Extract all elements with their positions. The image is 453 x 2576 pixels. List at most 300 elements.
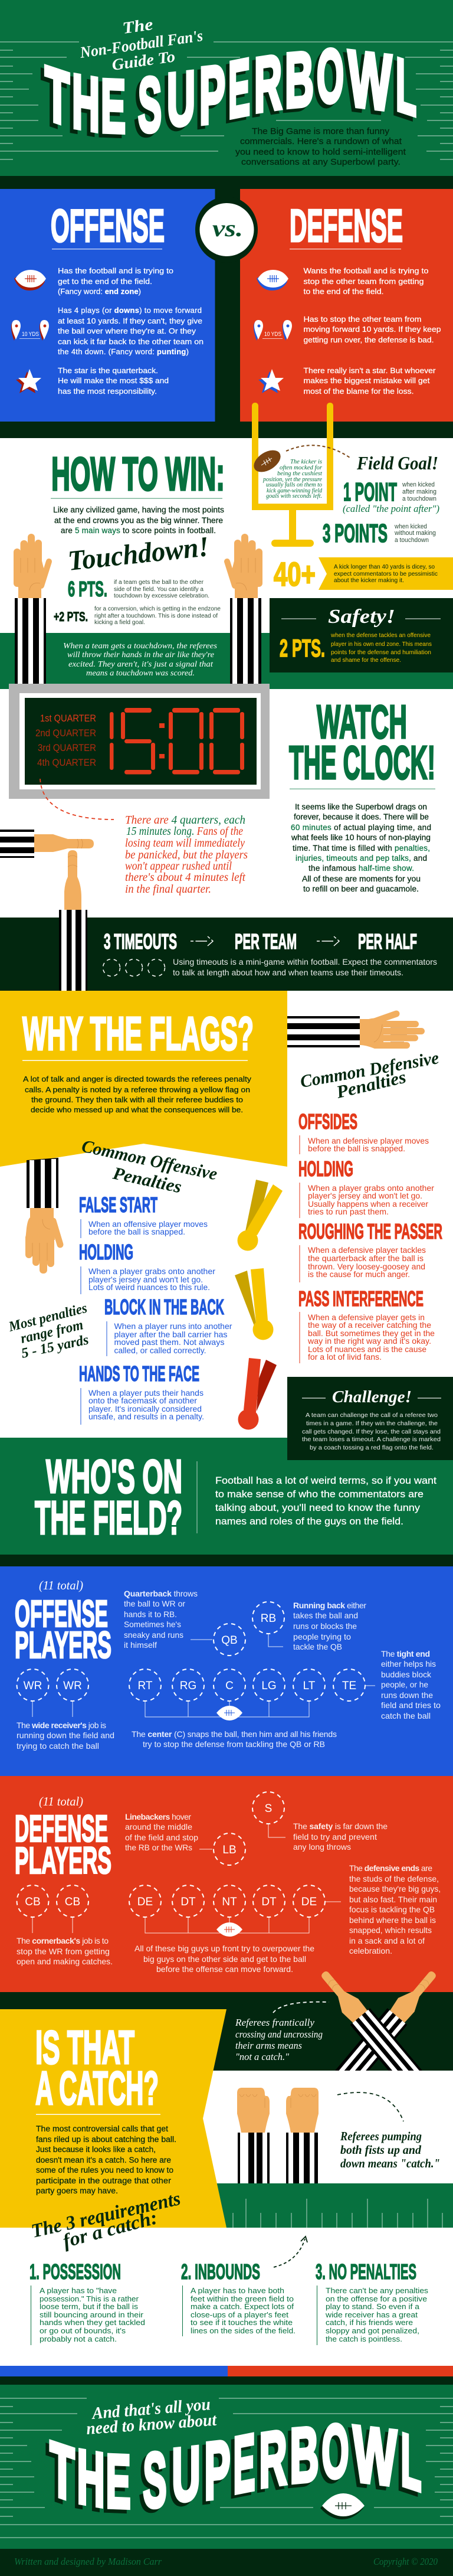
defensive ends text: in a sack and a lot of <box>349 1936 425 1945</box>
flags text: the ground. They then talk with all their referee buddies to <box>31 1095 243 1104</box>
player labels: S <box>265 1803 272 1815</box>
clock text: time. That time is filled with penalties, <box>293 844 430 853</box>
safety text <box>293 1821 388 1852</box>
title: the superbowl: O <box>317 34 344 119</box>
tight end text: buddies block <box>381 1670 432 1679</box>
heading: the 3 requirements: for a catch: <box>61 2207 160 2252</box>
quarterback text: Sometimes he's <box>124 1620 181 1629</box>
panel: common defensive penalties <box>298 1048 442 1363</box>
running back text: runs or blocks the <box>293 1621 357 1631</box>
requirement: no penalties: catch, if his friends were <box>326 2318 413 2327</box>
wide receiver text: The wide receiver's job is <box>17 1720 106 1730</box>
subtitle: the non-football fan's guide to: Non-Football Fan's <box>78 27 204 61</box>
timeouts text: to talk at length about how and when teams use their timeouts. <box>173 968 403 977</box>
icon: ten yard markers <box>11 320 49 341</box>
holding: When a player grabs onto another <box>308 1183 434 1193</box>
catch text: Just because it looks like a catch, <box>36 2145 156 2154</box>
catch note: Referees pumping <box>340 2129 422 2143</box>
holding: HOLDING <box>79 1240 133 1264</box>
requirement: possession <box>29 2260 145 2345</box>
panel: is that a catch <box>0 2009 226 2228</box>
block in the back: called, or called correctly. <box>114 1346 206 1355</box>
label: 11 total: (11 total) <box>39 1578 83 1592</box>
closing subtitle: need to know about <box>86 2411 218 2438</box>
block in the back: player after the ball carrier has <box>114 1330 228 1339</box>
player labels: QB <box>221 1634 238 1647</box>
heading: offense players <box>15 1592 111 1666</box>
quarter labels: 2nd QUARTER <box>35 727 96 739</box>
block in the back: When a player runs into another <box>114 1321 232 1331</box>
field text: to make sense of who the commentators are <box>215 1489 424 1500</box>
heading: common defensive penalties: Penalties <box>334 1067 408 1102</box>
title: the superbowl: R <box>254 38 282 129</box>
title: the superbowl: P <box>199 48 225 141</box>
requirement: possession: A player has to "have <box>40 2286 117 2295</box>
requirement: inbounds: to see if it touches the white <box>191 2318 293 2327</box>
player labels: DT <box>180 1896 196 1908</box>
defensive ends text: focus is tackling the QB <box>349 1905 435 1914</box>
flags text: calls. A penalty is noted by a referee throwing a yellow flag on <box>25 1085 250 1094</box>
pass interference <box>298 1287 435 1363</box>
hands to the face <box>79 1362 204 1425</box>
heading: common defensive penalties: Common Defensive <box>298 1048 441 1092</box>
forty plus callout: expect commentators to be pessimistic <box>334 570 438 577</box>
text: downs: at least 10 yards. If they can't, they give <box>58 316 202 325</box>
safety text <box>330 632 432 664</box>
plus two points <box>54 606 221 626</box>
clock text: injuries, timeouts and pep talks, and <box>296 854 427 863</box>
safety text: points for the defense and humiliation <box>331 649 431 656</box>
closing title: the superbowl: W <box>353 2410 397 2503</box>
heading: the 3 requirements: The 3 requirements <box>29 2188 182 2242</box>
one point: 1 POINT <box>343 478 397 507</box>
big guys text: All of these big guys up front try to overpower the <box>134 1944 314 1953</box>
title: the superbowl: T <box>45 51 70 143</box>
subtitle: the non-football fan's guide to <box>78 15 204 74</box>
six points: touchdown by excessive celebration. <box>114 593 209 599</box>
quarter labels: 1st QUARTER <box>40 713 96 724</box>
clock text: what feels like 10 hours of non-playing <box>291 833 431 842</box>
tight end text: runs down the <box>381 1690 433 1700</box>
icon: football <box>257 270 288 290</box>
player circles <box>17 1792 325 1917</box>
arrow: to sideline <box>274 2237 307 2267</box>
heading: defense players: DEFENSE <box>15 1807 108 1850</box>
icon: referee arm pointing right <box>287 1014 425 1049</box>
player labels: WR <box>24 1680 42 1692</box>
arc: clock callout <box>40 779 114 820</box>
block in the back: BLOCK IN THE BACK <box>104 1295 224 1319</box>
icon: kicked football <box>250 446 284 476</box>
holding: HOLDING <box>298 1157 353 1181</box>
goalpost <box>252 403 333 547</box>
icon: referee crossed arms <box>313 1964 444 2091</box>
catch text: doesn't mean it's a catch. So here are <box>36 2156 171 2164</box>
text: end zone <box>58 266 173 296</box>
panel: catch signal <box>201 2071 453 2228</box>
text: no star on defense <box>303 366 436 396</box>
linebacker text: of the field and stop <box>125 1833 198 1842</box>
tight end text: catch the ball <box>381 1711 431 1720</box>
panel: defense players <box>0 1776 453 1992</box>
text: end zone: Has the football and is trying to <box>58 266 173 275</box>
requirement: possession: hands when they get tackled <box>40 2318 145 2327</box>
title: the superbowl: L <box>396 42 416 133</box>
catch note <box>340 2129 440 2170</box>
referee signal explanation: will throw their hands in the air like they're <box>67 651 214 659</box>
pass interference: ball. But sometimes they get in the <box>308 1328 435 1338</box>
challenge text: times in a game. If they win the challenge, the <box>306 1420 438 1427</box>
text: ten yards defense: moving forward 10 yards. If they keep <box>303 325 441 334</box>
heading: field goal: Field Goal! <box>356 452 438 474</box>
center text <box>132 1729 337 1749</box>
holding: player's jersey and won't let go. <box>88 1275 203 1284</box>
requirement: inbounds: A player has to have both <box>191 2286 284 2295</box>
panel: scoreboard <box>9 684 270 799</box>
timeouts headings: PER TEAM <box>235 929 297 954</box>
connector lines <box>32 1634 375 1717</box>
pass interference: the way of a receiver catching the <box>308 1320 431 1330</box>
quarters note: There are 4 quarters, each <box>125 814 245 827</box>
heading: offense players: PLAYERS <box>15 1624 111 1666</box>
kicker note: usually falls on them to <box>266 482 322 488</box>
text: quarterback: The star is the quarterback. <box>58 366 158 375</box>
arrow <box>317 936 339 946</box>
timeouts text: Using timeouts is a mini-game within football. Expect the commentators <box>173 957 437 967</box>
note: penalty yards: 5 - 15 yards <box>20 1332 90 1362</box>
player labels: LB <box>222 1844 237 1856</box>
text: quarterback: has the most responsibility. <box>58 387 157 396</box>
connector lines <box>32 1824 341 1933</box>
defensive ends text: because they're big guys, <box>349 1884 441 1893</box>
requirement: possession: or go out of bounds, it's <box>40 2326 126 2335</box>
forty plus callout: about the kicker making it. <box>334 577 404 584</box>
pass interference: way in the right way and it's okay. <box>307 1336 431 1346</box>
quarterback text: the ball to WR or <box>124 1599 185 1608</box>
false start: FALSE START <box>79 1193 157 1217</box>
field text: names and roles of the guys on the field. <box>215 1516 403 1527</box>
pass interference: for a lot of livid fans. <box>308 1352 382 1362</box>
clock text: All of these are moments for you <box>302 874 421 883</box>
roughing the passer <box>298 1219 442 1282</box>
heading: defense players: PLAYERS <box>15 1839 111 1882</box>
copyright: Copyright © 2020 <box>373 2556 438 2567</box>
big guys text: big guys on the other side and get to the ball <box>143 1954 306 1964</box>
title: the superbowl: S <box>138 61 162 148</box>
icon: left fist <box>237 2088 270 2183</box>
player labels: LG <box>261 1680 277 1692</box>
field hash lines <box>233 2199 442 2228</box>
note: penalty yards <box>6 1301 90 1362</box>
hands to the face: When a player puts their hands <box>88 1388 203 1398</box>
wide receiver text: trying to catch the ball <box>17 1741 99 1751</box>
false start <box>79 1193 208 1238</box>
plus two points: right after a touchdown. This is done instead of <box>94 613 218 619</box>
plus two points: +2 PTS. <box>54 609 88 624</box>
panel: closing field <box>0 2385 453 2549</box>
panel: green band <box>0 633 453 689</box>
text: downs: the ball over where they're at. Or they <box>58 327 196 335</box>
catch text <box>36 2124 176 2195</box>
center text: The center (C) snaps the ball, then him and all his friends <box>132 1729 337 1739</box>
running back text: Running back either <box>293 1601 366 1610</box>
closing subtitle <box>86 2395 218 2438</box>
three points: a touchdown <box>395 537 429 544</box>
hands to the face: unsafe, and results in a penalty. <box>88 1412 204 1421</box>
clock text: 60 minutes of actual playing time, and <box>291 823 431 832</box>
icon: football <box>14 270 46 290</box>
footer <box>0 2549 453 2576</box>
not a catch note: "not a catch." <box>235 2051 290 2062</box>
panel: common offensive penalties <box>6 1137 232 1425</box>
panel: challenge <box>287 1377 453 1460</box>
heading: common offensive penalties: Penalties <box>111 1163 183 1197</box>
catch text: fans riled up is about catching the ball. <box>36 2135 176 2144</box>
quarters note: losing team will immediately <box>125 837 245 850</box>
flags text: decide who messed up and what the consequences will be. <box>31 1105 243 1114</box>
flags text <box>23 1075 252 1114</box>
icon: right fist <box>286 2088 319 2183</box>
heading: common offensive penalties: Common Offensive <box>80 1137 219 1184</box>
requirement: inbounds: 2. INBOUNDS <box>181 2260 260 2284</box>
quarter labels <box>35 713 96 768</box>
block in the back <box>104 1295 232 1356</box>
six points: 6 PTS. <box>68 577 107 601</box>
requirement: possession: still bouncing around in their <box>40 2310 144 2319</box>
text: no star on defense: There really isn't a star. But whoever <box>303 366 436 375</box>
requirement: possession: 1. POSSESSION <box>29 2260 121 2284</box>
offsides: When an defensive player moves <box>308 1136 429 1145</box>
holding: Usually happens when a receiver <box>308 1199 428 1209</box>
note: penalty yards: range from <box>19 1317 85 1347</box>
text: quarterback <box>58 366 169 396</box>
roughing the passer: is the cause for much anger. <box>308 1269 410 1279</box>
intro text: Like any civilized game, having the most points <box>53 505 224 514</box>
panel: safety <box>270 598 453 672</box>
referee signal explanation: means a touchdown was scored. <box>86 669 195 678</box>
flags text: A lot of talk and anger is directed towards the referees penalty <box>23 1075 252 1083</box>
quarter labels: 4th QUARTER <box>37 757 96 768</box>
text: end zone: get to the end of the field. <box>58 277 152 286</box>
wide receiver text <box>17 1720 114 1751</box>
digital clock 15:00 <box>110 708 244 775</box>
safety text: any long throws <box>293 1842 351 1852</box>
requirement: inbounds <box>181 2260 296 2336</box>
closing title: the superbowl: U <box>172 2430 201 2518</box>
one point: a touchdown <box>402 495 436 502</box>
panel: defense <box>240 189 453 422</box>
icon: football <box>320 2493 365 2519</box>
label: 11 total: (11 total) <box>39 1794 83 1808</box>
kicker note: position, yet the pressure <box>262 476 323 483</box>
clock text: to refill on beer and guacamole. <box>303 884 419 893</box>
plus two points: for a conversion, which is getting in the endzone <box>94 606 221 612</box>
text: ten yards defense: getting run over, the defense is bad. <box>303 335 434 344</box>
horizontal arm <box>0 830 94 858</box>
text: goal of defense <box>303 266 428 296</box>
intro text <box>235 127 406 167</box>
running back text: people trying to <box>293 1632 351 1641</box>
challenge text: the team loses a timeout. A challenge is marked <box>302 1436 441 1443</box>
arrow <box>191 936 213 946</box>
text: ten yards defense <box>303 315 441 344</box>
not a catch note <box>235 2017 323 2062</box>
text: goal of defense: Wants the football and is trying to <box>303 266 428 275</box>
player labels: RG <box>180 1680 196 1692</box>
intro text: The Big Game is more than funny <box>252 127 390 136</box>
roughing the passer: When a defensive player tackles <box>308 1245 426 1255</box>
center text: try to stop the defense from tackling the QB or RB <box>143 1739 325 1749</box>
linebacker text: the RB or the WRs <box>125 1843 192 1852</box>
title: the superbowl: E <box>228 41 250 135</box>
safety text: player in his own end zone. This means <box>331 641 432 648</box>
challenge text <box>302 1412 441 1451</box>
text: goal of defense: stop the other team from getting <box>303 277 424 286</box>
title: the superbowl: B <box>285 36 314 125</box>
intro text: commercials. Here's a rundown of what <box>240 137 402 146</box>
requirement: inbounds: make a catch. Expect lots of <box>191 2302 294 2311</box>
closing title: the superbowl: O <box>322 2409 349 2495</box>
safety text: The safety is far down the <box>293 1821 388 1831</box>
player labels: WR <box>63 1680 82 1692</box>
field text: Football has a lot of weird terms, so if you want <box>215 1475 436 1486</box>
referee signal explanation: excited. They aren't, it's just a signal that <box>68 660 214 669</box>
hands to the face: onto the facemask of another <box>88 1396 197 1405</box>
player labels: DE <box>137 1896 153 1908</box>
heading: who's on the field: THE FIELD? <box>35 1491 182 1544</box>
quarterback text: Quarterback throws <box>124 1589 198 1598</box>
big guys text: before the offense can move forward. <box>156 1964 293 1974</box>
clock text: forever, because it does. There will be <box>294 812 429 821</box>
six points: side of the field. You can identify a <box>114 586 203 593</box>
intro text: you need to know to hold semi-intelligent <box>235 148 406 157</box>
three points: without making <box>394 530 436 537</box>
arc: kick path <box>286 445 350 458</box>
player labels: CB <box>25 1896 41 1908</box>
requirement: no penalties: There can't be any penalties <box>326 2286 429 2295</box>
panel: header field <box>0 0 453 176</box>
closing title: the superbowl: S <box>143 2437 167 2523</box>
defensive ends text <box>349 1863 441 1955</box>
closing title: the superbowl: P <box>204 2424 231 2516</box>
one point: (called "the point after") <box>343 503 439 514</box>
credit: Written and designed by Madison Carr <box>14 2556 162 2567</box>
panel: offense players <box>0 1566 453 1776</box>
forty plus callout: A kick longer than 40 yards is dicey, so <box>334 563 435 570</box>
referee signal explanation: When a team gets a touchdown, the referees <box>63 642 218 651</box>
title: the superbowl: W <box>348 35 392 128</box>
field text <box>215 1475 436 1527</box>
closing title: the superbowl: T <box>50 2426 74 2518</box>
closing title: the superbowl: R <box>260 2413 287 2504</box>
cornerback text <box>17 1936 113 1966</box>
block in the back: moved past them. Not always <box>114 1337 224 1347</box>
defensive ends text: snapped, which results <box>349 1925 432 1935</box>
dark band: not a catch <box>0 1992 453 2071</box>
catch text: some of the rules you need to know to <box>36 2166 173 2175</box>
holding <box>298 1157 434 1218</box>
three points: when kicked <box>394 523 427 530</box>
arm crossing right <box>333 1964 444 2091</box>
requirement: possession: probably not a catch. <box>40 2335 117 2343</box>
icon: star <box>258 369 284 393</box>
note: penalty yards: Most penalties <box>6 1301 88 1335</box>
text: end zone: (Fancy word: end zone) <box>58 287 141 296</box>
panel: who's on the field <box>0 1438 453 1555</box>
icon: referee timeout arms <box>0 830 94 991</box>
team colour strip <box>0 2366 453 2385</box>
player labels: RT <box>138 1680 153 1692</box>
intro text <box>53 505 224 535</box>
forty plus callout: 40+ <box>274 556 316 593</box>
requirement: possession: possession." This is a rather <box>40 2294 139 2303</box>
challenge text: call gets changed. If they lose, the call stays and <box>302 1428 441 1435</box>
requirement: no penalties: wide receiver has a great <box>325 2310 418 2319</box>
catch note: both fists up and <box>340 2143 421 2157</box>
badge: vs football <box>195 197 258 263</box>
defensive ends text: celebration. <box>349 1946 392 1955</box>
holding: tries to run past them. <box>308 1207 389 1216</box>
quarterback text: sneaky and runs <box>124 1630 183 1640</box>
timeouts text <box>173 957 437 977</box>
running back text: tackle the QB <box>293 1642 342 1651</box>
challenge text: A team can challenge the call of a referee two <box>306 1412 438 1419</box>
forty plus callout <box>274 556 453 593</box>
text: downs: can kick it far back to the other team on <box>58 337 203 346</box>
icon: football <box>216 1706 242 1720</box>
quarters note <box>125 814 248 896</box>
six points: if a team gets the ball to the other <box>114 579 204 586</box>
dark divider band <box>0 1555 453 1566</box>
subtitle: the non-football fan's guide to: Guide To <box>111 47 176 74</box>
player circles <box>17 1602 365 1701</box>
title: the superbowl: E <box>101 64 126 149</box>
heading: defense players <box>15 1807 111 1882</box>
running back text: takes the ball and <box>293 1611 358 1620</box>
requirement: no penalties: on the offense for a positive <box>326 2294 427 2303</box>
icon: ten yard markers <box>254 320 292 341</box>
heading: why the flags: WHY THE FLAGS? <box>22 1007 254 1060</box>
panel: why the flags <box>0 991 287 1167</box>
quarter labels: 3rd QUARTER <box>38 742 96 753</box>
cornerback text: open and making catches. <box>17 1957 113 1966</box>
wide receiver text: running down the field and <box>17 1731 114 1740</box>
title: the superbowl <box>45 34 416 149</box>
dark band behind offense and defense <box>0 176 453 438</box>
holding: player's jersey and won't let go. <box>308 1191 422 1200</box>
holding: When a player grabs onto another <box>88 1266 215 1276</box>
kicker note: goals with seconds left. <box>266 493 322 499</box>
intro text: are 5 main ways to score points in football. <box>61 526 216 535</box>
heading: touchdown: Touchdown! <box>67 531 211 577</box>
safety text: when the defense tackles an offensive <box>330 632 431 639</box>
requirement: no penalties: play to stand. So even if a <box>326 2302 420 2311</box>
field text: talking about, you'll need to know the funny <box>215 1503 421 1513</box>
title: the superbowl: U <box>167 55 195 143</box>
catch text: participate in the outrage that other <box>36 2176 172 2185</box>
icon: referee arm pointing down <box>25 1158 60 1274</box>
text: downs: Has 4 plays (or downs) to move forward <box>58 306 202 315</box>
requirement: no penalties <box>316 2260 429 2345</box>
closing title: the superbowl: L <box>401 2417 421 2508</box>
roughing the passer: the quarterback after the ball is <box>308 1253 424 1263</box>
heading: offense players: OFFENSE <box>15 1592 108 1635</box>
safety text: field to try and prevent <box>293 1832 377 1842</box>
false start: When an offensive player moves <box>88 1219 208 1229</box>
text: downs: the 4th down. (Fancy word: punting) <box>58 347 189 356</box>
roughing the passer: thrown. Very loosey-goosey and <box>308 1262 425 1271</box>
player labels: CB <box>65 1896 80 1908</box>
